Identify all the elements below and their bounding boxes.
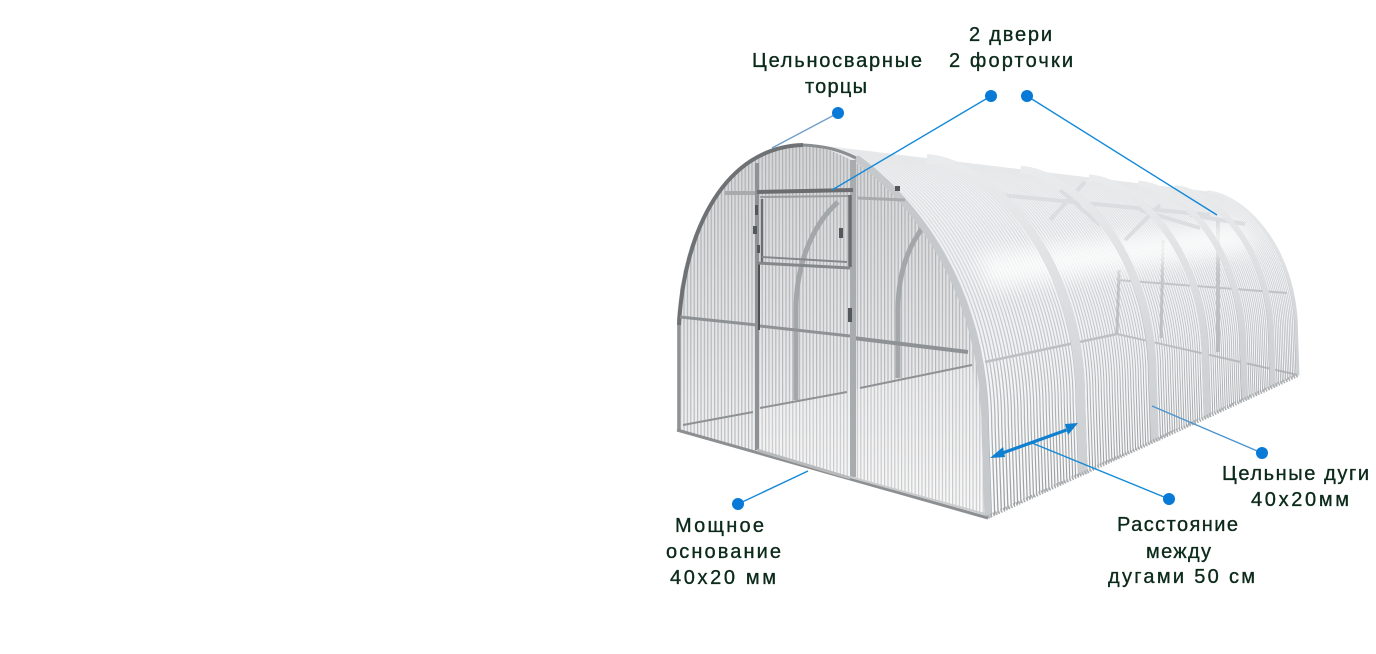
callout line: door and vent right: [1027, 96, 1217, 215]
label: arch spacing: Расстояние: [1117, 514, 1238, 536]
label: welded end walls: Цельносварные: [752, 50, 922, 72]
far wall structure: [985, 220, 1298, 375]
roof cross bars: [1000, 182, 1245, 240]
side roof surface: [803, 144, 1298, 518]
label: strong base: [666, 515, 781, 589]
label: arch spacing: [1108, 514, 1255, 588]
label: solid arches: 40х20мм: [1251, 489, 1349, 511]
front arch: [856, 158, 988, 518]
window frame: [757, 190, 853, 268]
inner arches seen through end wall: [796, 202, 924, 400]
label: doors and vents: 2 форточки: [949, 50, 1073, 72]
label: strong base: Мощное: [675, 515, 764, 537]
callout line: base: [738, 471, 808, 504]
door hardware: [753, 186, 900, 322]
greenhouse illustration: [677, 144, 1298, 518]
label: doors and vents: [949, 24, 1073, 72]
label: strong base: основание: [666, 541, 781, 563]
end wall panel: [677, 144, 988, 518]
callout line: arch spacing: [1032, 443, 1169, 499]
label: welded end walls: [752, 50, 922, 98]
polycarbonate ribs: [803, 144, 1296, 518]
callout dots: [732, 90, 1268, 510]
label: arch spacing: между: [1146, 541, 1211, 563]
label: strong base: 40х20 мм: [670, 567, 776, 589]
label: doors and vents: 2 двери: [969, 24, 1052, 46]
label: solid arches: [1222, 463, 1369, 511]
label: solid arches: Цельные дуги: [1222, 463, 1369, 485]
horizontal frame bars: [680, 193, 972, 425]
callout line: end walls: [772, 113, 838, 148]
label: welded end walls: торцы: [805, 76, 867, 98]
lower floor area seen through the door: [757, 365, 988, 518]
steel arches: [927, 159, 1298, 474]
roof highlight band: [975, 222, 1258, 290]
label: arch spacing: дугами 50 см: [1108, 566, 1255, 588]
callout line: door and vent left: [832, 96, 991, 190]
double arrow: arch spacing: [990, 423, 1078, 458]
base frame: [677, 375, 1298, 518]
door posts: [757, 160, 853, 477]
callout line: arches: [1152, 406, 1262, 453]
